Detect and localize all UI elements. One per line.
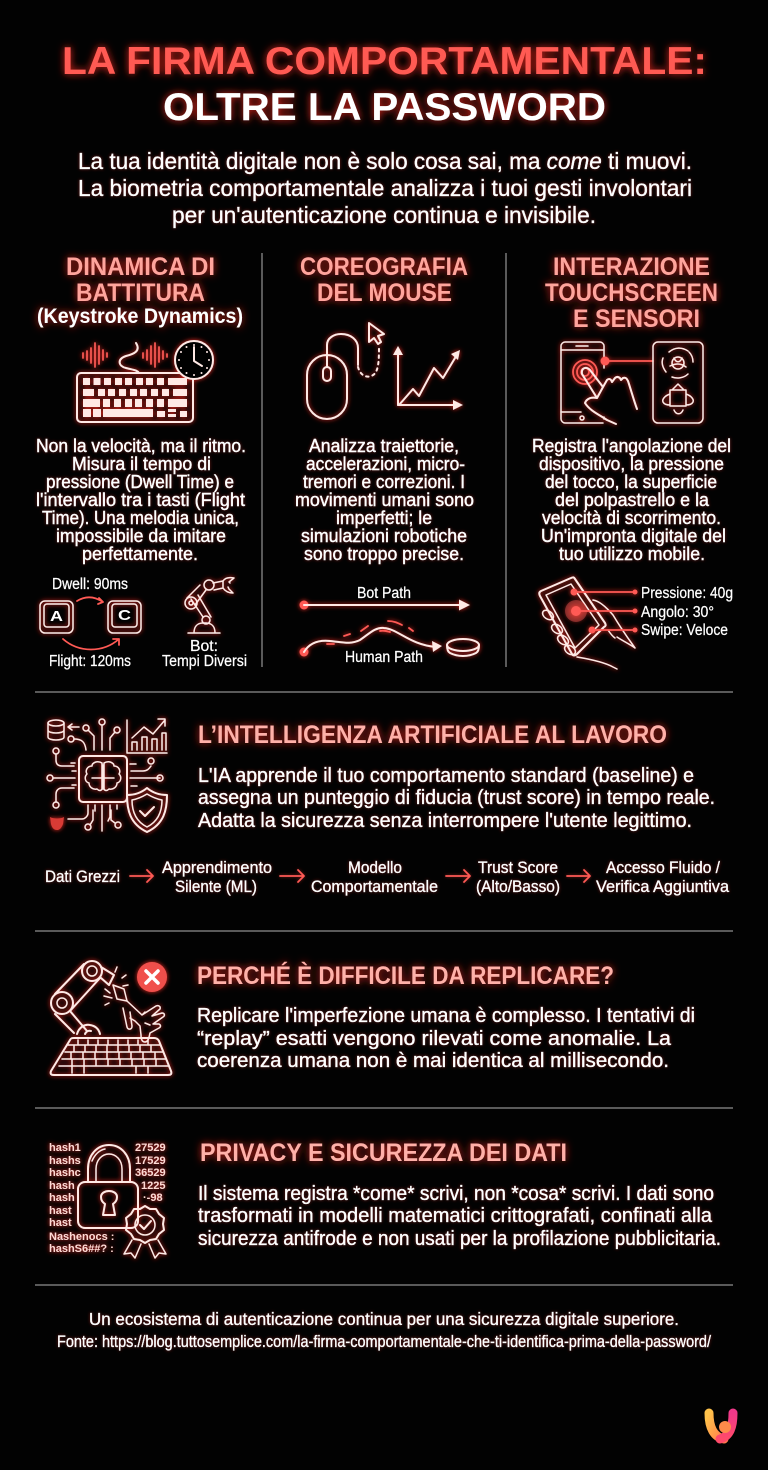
flow diagram: from raw data to access [45, 858, 730, 896]
icon: phone touch and sensors [561, 342, 703, 424]
icon: padlock with hashes and badge: hash [49, 1192, 75, 1204]
heading: mouse choreography [300, 253, 468, 307]
text: mouse description: imperfetti; le [336, 507, 432, 528]
text: keystroke description: impossibile da imitare [56, 525, 226, 546]
title: LA FIRMA COMPORTAMENTALE: [62, 40, 707, 83]
intro text: per un'autenticazione continua e invisibile. [172, 202, 596, 228]
intro text: La biometria comportamentale analizza i tuoi gesti involontari [78, 175, 692, 201]
text: mouse description: movimenti umani sono [295, 489, 474, 510]
heading: touchscreen and sensors: TOUCHSCREEN [545, 279, 718, 307]
diagram: dwell and flight time keys: Dwell: 90ms [52, 576, 128, 593]
chart: bot path vs human path [300, 585, 479, 666]
diagram: dwell and flight time keys [40, 576, 141, 670]
flow diagram: from raw data to access: Comportamentale [311, 877, 438, 896]
icon: padlock with hashes and badge: hash [49, 1180, 75, 1192]
footer text: Un ecosistema di autenticazione continua per una sicurezza digitale superiore. [89, 1309, 679, 1329]
icon: padlock with hashes and badge: hast [49, 1205, 72, 1217]
text: mouse description: sono troppo precise. [304, 543, 464, 564]
text: replication description: “replay” esatti vengono rilevati come anomalie. La [197, 1027, 672, 1050]
text: keystroke description: Non la velocità, ma il ritmo. [36, 435, 246, 456]
panel: privacy and data security [49, 1139, 721, 1258]
diagram: hand holding phone with sensor readings: Pressione: 40g [641, 585, 733, 602]
text: mouse description: Analizza traiettorie, [309, 435, 459, 456]
heading: mouse choreography: DEL MOUSE [317, 279, 452, 307]
text: replication description: Replicare l'imperfezione umana è complesso. I tentativi di [197, 1004, 695, 1027]
text: bot different times: Tempi Diversi [162, 653, 247, 670]
chart: bot path vs human path: Human Path [345, 649, 423, 666]
text: bot different times: Bot: [190, 638, 218, 655]
icon: padlock with hashes and badge: 27529 [135, 1142, 166, 1154]
text: keystroke description: perfettamente. [82, 543, 198, 564]
text: privacy description: sicurezza antifrode e non usati per la profilazione pubblicitaria. [198, 1227, 721, 1250]
flow diagram: from raw data to access: (Alto/Basso) [476, 877, 560, 896]
column dividers [262, 253, 506, 667]
diagram: hand holding phone with sensor readings [539, 577, 733, 669]
heading: mouse choreography: COREOGRAFIA [300, 253, 468, 281]
flow diagram: from raw data to access: Silente (ML) [175, 877, 257, 896]
text: keystroke description [36, 435, 246, 564]
text: mouse description: tremori e correzioni. I [303, 471, 465, 492]
text: replication description [197, 1004, 695, 1072]
panel: keystroke dynamics [36, 253, 247, 670]
intro text: La tua identità digitale non è solo cosa sai, ma come ti muovi. [78, 148, 692, 174]
panel: artificial intelligence [45, 719, 730, 896]
icon: keyboard with sound waves and clock [77, 341, 213, 422]
text: touchscreen description: Un'impronta digitale del [541, 525, 726, 546]
flow diagram: from raw data to access: Accesso Fluido / [606, 858, 720, 877]
panel: hard to replicate [51, 961, 695, 1075]
icon: padlock with hashes and badge: hast [49, 1217, 72, 1229]
icon: mouse with cursor and chart [307, 323, 463, 419]
heading: touchscreen and sensors [545, 253, 718, 333]
icon: padlock with hashes and badge: Nashenocs : [49, 1231, 114, 1243]
icon: robot arm, human hand and keyboard [51, 961, 171, 1075]
heading: touchscreen and sensors: INTERAZIONE [553, 253, 710, 281]
heading: keystroke dynamics: DINAMICA DI [66, 253, 215, 281]
text: privacy description: trasformati in modelli matematici crittografati, confinati alla [198, 1204, 713, 1227]
text: mouse description [295, 435, 474, 564]
text: touchscreen description [532, 435, 731, 564]
icon: padlock with hashes and badge: hashs [49, 1155, 81, 1167]
icon: padlock with hashes and badge: hash1 [49, 1142, 81, 1154]
flow diagram: from raw data to access: Trust Score [478, 858, 558, 877]
text: AI description: L'IA apprende il tuo comportamento standard (baseline) e [198, 764, 694, 787]
icon: padlock with hashes and badge: ·-98 [143, 1192, 163, 1204]
flow diagram: from raw data to access: Apprendimento [162, 858, 272, 877]
intro text [78, 148, 692, 228]
text: privacy description [198, 1182, 721, 1250]
text: touchscreen description: tuo utilizzo mobile. [559, 543, 705, 564]
heading: keystroke dynamics: BATTITURA [76, 279, 205, 307]
diagram: hand holding phone with sensor readings: Angolo: 30° [641, 604, 714, 621]
panel: mouse choreography [295, 253, 479, 666]
diagram: dwell and flight time keys: A [50, 608, 63, 625]
flow diagram: from raw data to access: Verifica Aggiuntiva [596, 877, 730, 896]
icon: padlock with hashes and badge: hashS6##? : [49, 1243, 114, 1255]
diagram: hand holding phone with sensor readings: Swipe: Veloce [641, 622, 728, 639]
heading: why hard to replicate: PERCHÉ È DIFFICILE DA REPLICARE? [197, 961, 614, 990]
section dividers [35, 692, 733, 1285]
text: touchscreen description: velocità di scorrimento. [542, 507, 721, 528]
chart: bot path vs human path: Bot Path [357, 585, 411, 602]
heading: AI at work: L’INTELLIGENZA ARTIFICIALE AL LAVORO [198, 721, 667, 749]
text: keystroke description: Time). Una melodia unica, [42, 507, 239, 528]
icon: padlock with hashes and badge: hashc [49, 1167, 81, 1179]
icon: padlock with hashes and badge: 36529 [135, 1167, 166, 1179]
flow diagram: from raw data to access: Modello [348, 858, 402, 877]
text: keystroke description: pressione (Dwell Time) e [46, 471, 234, 492]
text: mouse description: simulazioni robotiche [301, 525, 467, 546]
diagram: dwell and flight time keys: C [118, 607, 131, 624]
title [62, 40, 707, 129]
text: replication description: coerenza umana non è mai identica al millisecondo. [197, 1049, 669, 1072]
text: privacy description: Il sistema registra *come* scrivi, non *cosa* scrivi. I dati sono [198, 1182, 714, 1205]
text: bot different times [162, 638, 247, 670]
text: touchscreen description: Registra l'angolazione del [532, 435, 731, 456]
text: keystroke description: Misura il tempo di [72, 453, 211, 474]
diagram: dwell and flight time keys: Flight: 120ms [49, 653, 131, 670]
text: AI description: Adatta la sicurezza senza interrompere l'utente legittimo. [198, 809, 692, 832]
title: OLTRE LA PASSWORD [163, 86, 606, 129]
text: touchscreen description: del tocco, la superficie [545, 471, 717, 492]
flow diagram: from raw data to access: Dati Grezzi [45, 867, 120, 886]
text: AI description: assegna un punteggio di fiducia (trust score) in tempo reale. [198, 786, 715, 809]
heading: keystroke dynamics: (Keystroke Dynamics) [37, 305, 243, 328]
text: AI description [198, 764, 715, 832]
icon: padlock with hashes and badge: 1225 [141, 1180, 165, 1192]
panel: touchscreen and sensors [532, 253, 733, 669]
heading: privacy and data security: PRIVACY E SICUREZZA DEI DATI [200, 1139, 567, 1167]
icon: logo [709, 1413, 733, 1439]
icon: AI chip with brain, data, chart and shield [47, 719, 167, 832]
text: keystroke description: l'intervallo tra i tasti (Flight [36, 489, 245, 510]
heading: touchscreen and sensors: E SENSORI [573, 305, 700, 333]
text: mouse description: accelerazioni, micro- [306, 453, 465, 474]
icon: padlock with hashes and badge: 17529 [135, 1155, 166, 1167]
icon: robot arm [185, 578, 234, 633]
icon: padlock with hashes and badge [49, 1142, 166, 1258]
text: touchscreen description: del polpastrello e la [555, 489, 710, 510]
heading: keystroke dynamics [37, 253, 243, 328]
footer text [57, 1309, 711, 1351]
text: touchscreen description: dispositivo, la pressione [539, 453, 724, 474]
